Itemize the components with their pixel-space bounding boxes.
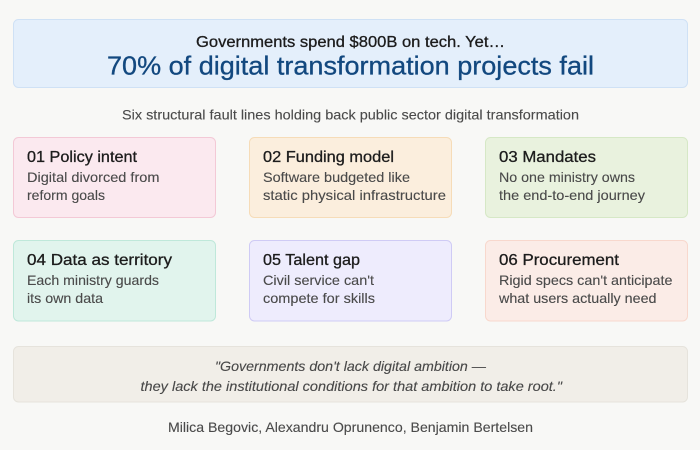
card 03: mandates xyxy=(486,138,688,218)
card 05 heading: 05 Talent gap xyxy=(263,252,360,269)
quote text xyxy=(140,358,563,394)
card 04 body: its own data xyxy=(27,290,103,306)
card 02: funding model xyxy=(250,138,452,218)
header lead-in text: Governments spend $800B on tech. Yet… xyxy=(196,34,505,51)
card 03 body: No one ministry owns xyxy=(499,169,635,185)
card 03 body: the end-to-end journey xyxy=(499,187,645,203)
card 03 heading: 03 Mandates xyxy=(499,149,596,166)
main title: 70% of digital transformation projects fail xyxy=(107,50,594,80)
card 04 body: Each ministry guards xyxy=(27,272,159,288)
card 01 body: Digital divorced from xyxy=(27,169,160,185)
card 02 body: static physical infrastructure xyxy=(263,187,446,203)
card 06 body: Rigid specs can't anticipate xyxy=(499,272,673,288)
card 06 body: what users actually need xyxy=(498,290,656,306)
quote panel xyxy=(14,346,688,402)
quote text: they lack the institutional conditions for that ambition to take root." xyxy=(140,378,563,394)
card 01 body: reform goals xyxy=(27,187,105,203)
card 01 heading: 01 Policy intent xyxy=(27,149,138,166)
card 04 body xyxy=(27,272,159,306)
card 05 body: Civil service can't xyxy=(263,272,374,288)
header panel xyxy=(14,20,688,88)
card 04: data as territory xyxy=(14,240,216,321)
card 02 heading: 02 Funding model xyxy=(263,149,394,166)
card 04 heading: 04 Data as territory xyxy=(27,252,172,269)
card 03 body xyxy=(499,169,645,203)
card 06 body xyxy=(498,272,673,306)
authors credit: Milica Begovic, Alexandru Oprunenco, Benjamin Bertelsen xyxy=(168,419,533,435)
card 05 body: compete for skills xyxy=(263,290,375,306)
card 06: procurement xyxy=(486,240,688,321)
quote text: "Governments don't lack digital ambition — xyxy=(215,358,487,374)
card 06 heading: 06 Procurement xyxy=(499,252,620,269)
card 02 body: Software budgeted like xyxy=(263,169,410,185)
subtitle: Six structural fault lines holding back public sector digital transformation xyxy=(122,106,579,122)
card 02 body xyxy=(263,169,446,203)
card 05: talent gap xyxy=(250,240,452,321)
card 01 body xyxy=(27,169,160,203)
card 01: policy intent xyxy=(14,138,216,218)
card 05 body xyxy=(263,272,375,306)
